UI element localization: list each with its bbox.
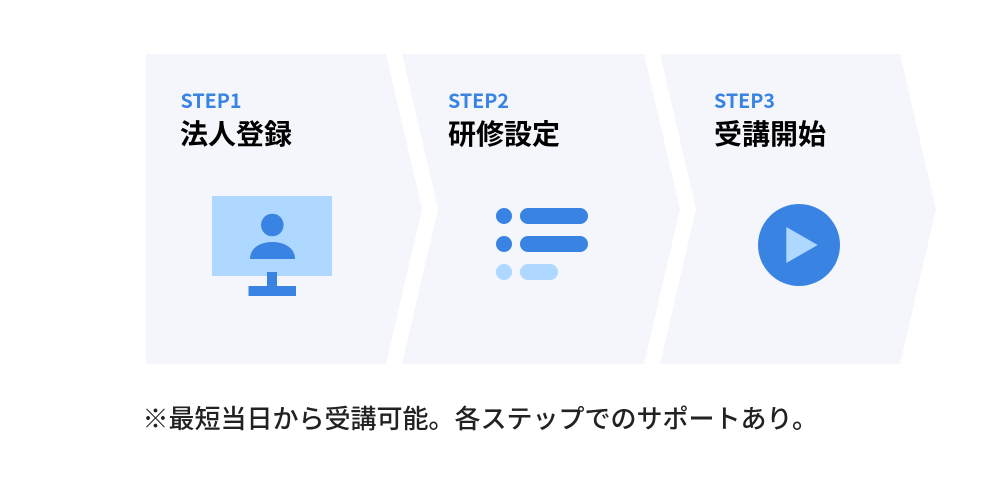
step 3 title: 受講開始 — [714, 113, 826, 153]
step 2 label: STEP2 — [448, 85, 509, 114]
step 2 title: 研修設定 — [448, 113, 560, 153]
panel: step 3 chevron — [660, 54, 936, 364]
step 3 label: STEP3 — [714, 85, 775, 114]
footnote: ※最短当日から受講可能。各ステップでのサポートあり。 — [142, 399, 818, 436]
panel: step 1 chevron — [146, 54, 422, 364]
step 1 label: STEP1 — [180, 85, 242, 114]
icon: monitor with person — [212, 196, 332, 296]
icon: play button — [758, 204, 840, 286]
panel: step 2 chevron — [402, 54, 680, 364]
step 1 title: 法人登録 — [180, 113, 292, 153]
icon: list — [496, 208, 588, 280]
